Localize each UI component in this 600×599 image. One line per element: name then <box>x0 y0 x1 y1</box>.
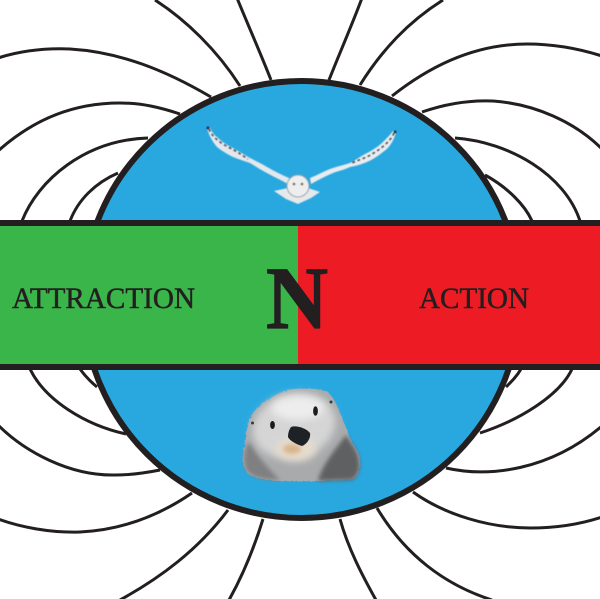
blue circle <box>83 81 520 518</box>
otter ears <box>251 400 332 424</box>
label: ACTION: ACTION <box>419 282 529 315</box>
owl wing markings <box>209 129 394 163</box>
green half: attraction <box>0 223 299 367</box>
otter body silhouette <box>243 389 360 481</box>
field lines: lower right <box>340 369 600 599</box>
otter dark lower fur <box>318 435 360 481</box>
otter face highlight <box>272 396 324 420</box>
owl wing tips <box>206 126 396 134</box>
magnet bar <box>0 220 600 370</box>
owl head <box>287 175 309 197</box>
otter eyes <box>270 406 318 429</box>
field lines: upper left <box>0 0 271 221</box>
otter muzzle <box>276 437 316 461</box>
owl left wing <box>207 127 289 184</box>
bar top edge <box>0 220 600 226</box>
owl eyes <box>293 183 303 185</box>
bar bottom edge <box>0 364 600 370</box>
owl tail and body <box>274 188 320 204</box>
owl right wing <box>310 131 396 184</box>
otter nose <box>288 426 310 446</box>
icon: snowy owl <box>206 126 396 204</box>
field lines: upper right <box>329 0 600 221</box>
icon: sea otter <box>243 384 360 481</box>
otter left shadow <box>244 442 280 480</box>
label: N pole: N <box>266 250 328 348</box>
red half: action <box>298 223 600 367</box>
otter chin tan <box>283 444 301 454</box>
otter face <box>245 384 343 468</box>
field lines: lower left <box>0 369 263 599</box>
label: ATTRACTION: ATTRACTION <box>12 282 195 315</box>
